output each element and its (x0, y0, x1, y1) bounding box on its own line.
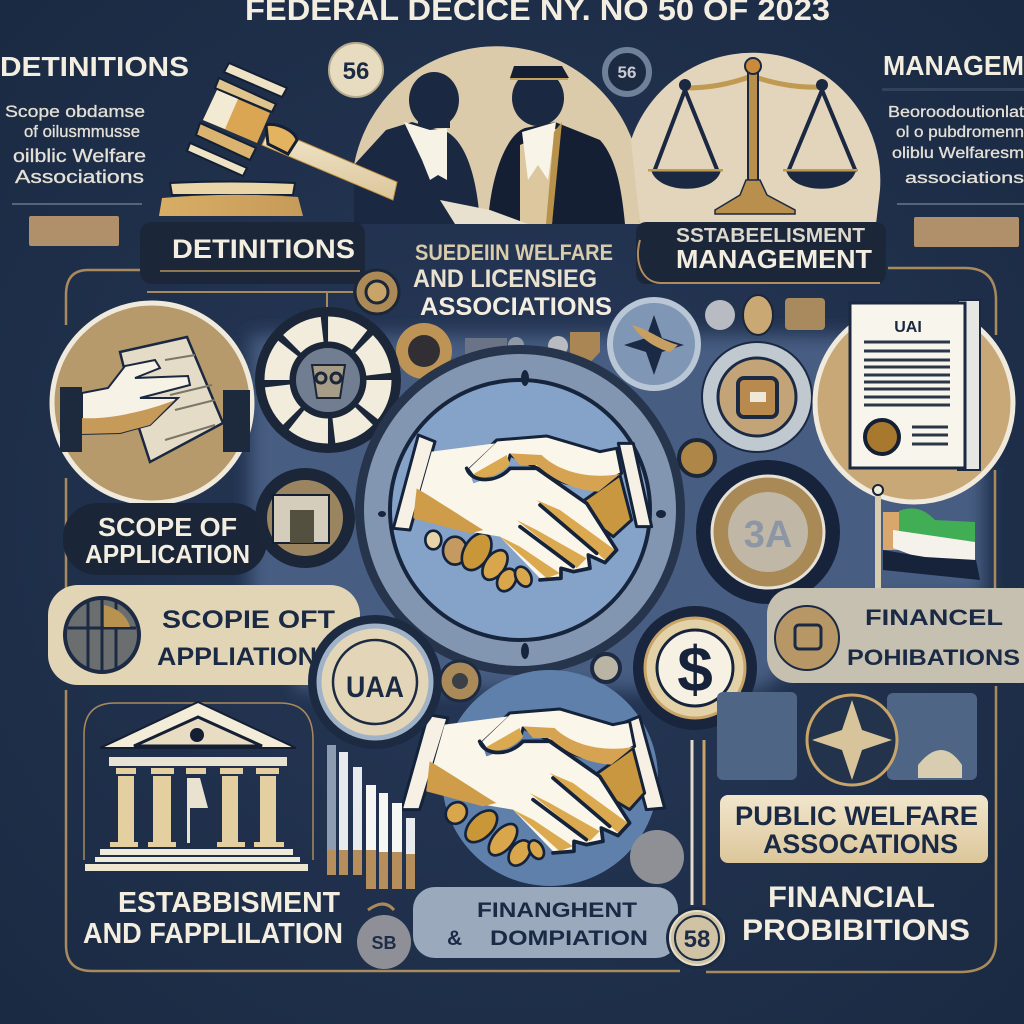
label: definitions pill: DETINITIONS (172, 234, 355, 264)
label: licensing heading (413, 240, 613, 321)
badge: UAA circle (308, 615, 442, 749)
pill: management and compilation: FINANGHENT (477, 899, 637, 922)
icon: dollar coin (633, 606, 757, 730)
panel: top left definitions: Scope obdamse (5, 102, 145, 121)
label: financial prohibitions: PROBIBITIONS (742, 914, 970, 947)
badge: 58 seal: 58 (684, 926, 710, 953)
icon: document seal (255, 468, 355, 568)
pill: financial prohibitions: FINANCEL (865, 605, 1003, 630)
lower handshake disc (401, 670, 684, 886)
panel: document hand-over circle (52, 303, 252, 503)
label: establishment and application: ESTABBISMENT (118, 887, 340, 919)
label: establishment and application: AND FAPPLILATION (83, 918, 343, 950)
panel: UAE document circle (815, 300, 1013, 502)
badge: seal right (605, 50, 649, 94)
icon: dollar coin: $ (677, 633, 713, 705)
label: establishment management pill: MANAGEMENT (676, 244, 872, 274)
label: public welfare associations (720, 795, 988, 863)
panel: top left definitions: of oilusmmusse (24, 122, 140, 141)
label: establishment management pill (636, 222, 886, 284)
panel: top right management: ol o pubdromenn (896, 124, 1024, 141)
pill: management and compilation: DOMPIATION (490, 927, 648, 950)
illustration: scales of justice (631, 53, 880, 224)
icon: seal bottom (357, 904, 411, 969)
illustration: courthouse (85, 702, 308, 871)
label: financial prohibitions: FINANCIAL (768, 881, 935, 914)
icon: small coin centre right (592, 654, 620, 682)
label: establishment management pill: SSTABEELISMENT (676, 225, 865, 247)
label: scope of application: APPLICATION (85, 539, 250, 569)
panel: top right management: associations (905, 170, 1024, 187)
label: scope of application: SCOPE OF (98, 512, 237, 542)
badge: UAE 3A medallion: 3A (744, 514, 792, 556)
icon: lower handshake (401, 709, 665, 870)
pill: financial prohibitions: POHIBATIONS (847, 645, 1020, 670)
panel: UAE document circle: UAI (894, 319, 922, 336)
pill: management and compilation (413, 887, 678, 958)
badge: 56 seal: 56 (343, 58, 369, 85)
pill: scope of application (48, 585, 360, 685)
label: licensing heading: ASSOCIATIONS (420, 293, 612, 321)
icon: central handshake (393, 435, 652, 595)
bar chart (327, 745, 415, 889)
label: financial prohibitions (742, 881, 970, 947)
panel: top left definitions: Associations (15, 167, 144, 187)
panel: top right management (882, 50, 1024, 247)
label: public welfare associations: PUBLIC WELFARE (735, 801, 978, 831)
frame: inner gold border (66, 268, 996, 972)
backdrop: blue central field (250, 335, 985, 690)
label: licensing heading: AND LICENSIEG (413, 265, 597, 293)
badge: 56 seal (329, 43, 383, 97)
panel: top right management: oliblu Welfaresm (892, 145, 1024, 162)
badge: 58 seal (666, 907, 728, 969)
badge: UAA circle: UAA (346, 671, 404, 704)
icons: top right small seals (679, 295, 825, 476)
panel: top left definitions (0, 51, 189, 246)
icon: star badge (610, 300, 698, 388)
panel: top right management: Beoroodoutionlat (888, 104, 1024, 121)
panel: star emblem area (717, 692, 977, 785)
label: scope of application (63, 503, 267, 575)
icon: UAE flag (873, 485, 980, 588)
illustration: lawyers in tan circle (354, 46, 640, 224)
pill: management and compilation: & (447, 927, 462, 950)
pill: scope of application: APPLIATION (157, 643, 317, 671)
pill: financial prohibitions (767, 588, 1024, 683)
central handshake disc (355, 345, 685, 675)
label: licensing heading: SUEDEIIN WELFARE (415, 240, 613, 265)
label: definitions pill (140, 222, 365, 284)
badge: UAE 3A medallion (696, 460, 840, 604)
panel: top left definitions: oilblic Welfare (13, 146, 146, 166)
pill: scope of application: SCOPIE OFT (162, 606, 335, 634)
panel: top left definitions: DETINITIONS (0, 51, 189, 82)
icon: coin medallion (702, 342, 812, 452)
illustration: gavel (159, 63, 397, 216)
label: establishment and application (83, 887, 343, 950)
icon row: decorative seals (396, 323, 600, 379)
icon: dial emblem (255, 307, 401, 453)
icon: small seal centre (440, 661, 480, 701)
badge: seal right: 56 (618, 63, 636, 82)
icon: seal bottom: SB (371, 933, 397, 953)
icon: small seal near top (355, 270, 399, 314)
label: public welfare associations: ASSOCATIONS (763, 829, 958, 859)
